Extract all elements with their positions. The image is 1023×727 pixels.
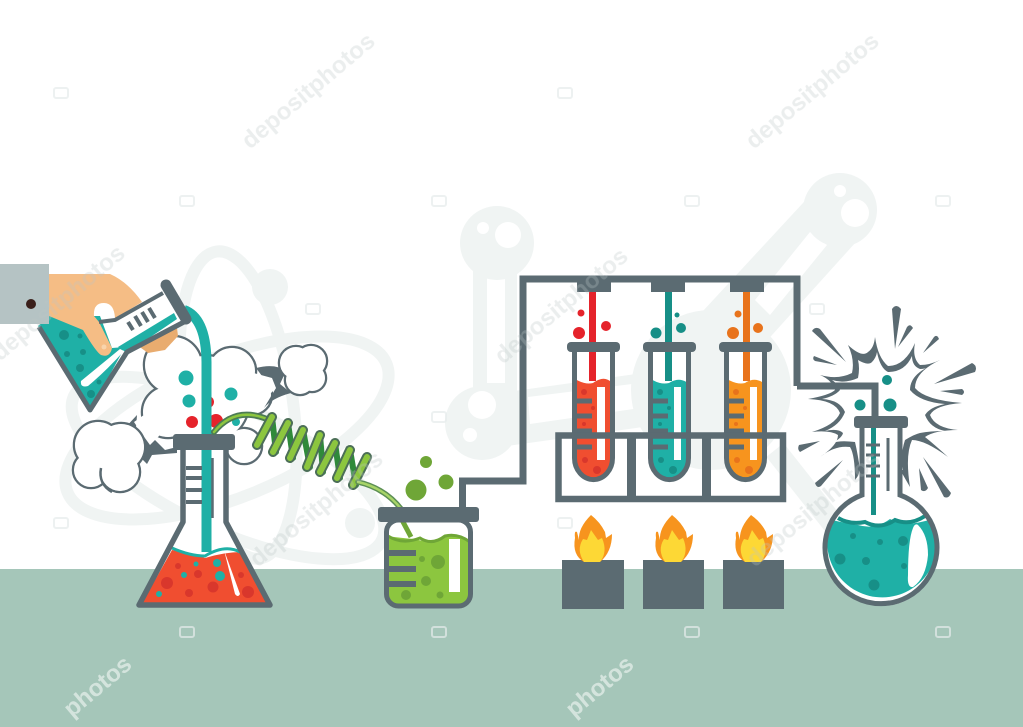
flask graduations and lip [173,434,235,518]
beaker [378,507,479,606]
flask: conical with red liquid [139,449,270,605]
burner 3 with flame [723,515,784,609]
right smoke rays [245,372,276,402]
tilted flask [38,293,184,411]
pipe system [462,279,797,508]
round flask [825,416,938,606]
burner 1 with flame [562,515,624,609]
stoppers [577,279,764,292]
spiral tube [214,415,402,510]
watermarks: depositphotos [490,243,634,370]
bottom watermarks on table [59,651,639,723]
watermarks: depositphotos [741,28,885,155]
test tube: red [567,292,620,480]
watermarks [0,28,886,573]
watermarks: depositphotos [237,28,381,155]
test tube: teal [643,292,696,480]
watermarks: depositphotos [742,446,886,573]
left smoke connector [123,415,177,464]
pipe into round flask [797,386,875,420]
left smoke puff [73,421,145,492]
burner 2 with flame [643,515,704,609]
drops in smoke [178,370,240,428]
right smoke connector [256,366,291,408]
tilted flask neck [99,285,186,330]
bottom watermarks on table: photos [561,651,639,723]
left smoke rays [134,400,175,445]
explosion burst [798,306,976,498]
table surface [0,569,1023,727]
hand [49,274,142,356]
sleeve [0,264,49,324]
background atom symbol [41,244,413,596]
background molecule [445,173,877,545]
central smoke cloud [142,336,272,464]
pouring stream [184,310,206,552]
test tube rack [558,435,783,499]
green bubbles [406,456,454,500]
test tube: orange [719,292,772,480]
lower fingers behind flask [137,328,178,353]
right smoke puff [279,345,327,395]
watermarks: depositphotos [245,446,389,573]
bottom watermarks on table: photos [59,651,137,723]
watermark camera icons [54,88,950,637]
